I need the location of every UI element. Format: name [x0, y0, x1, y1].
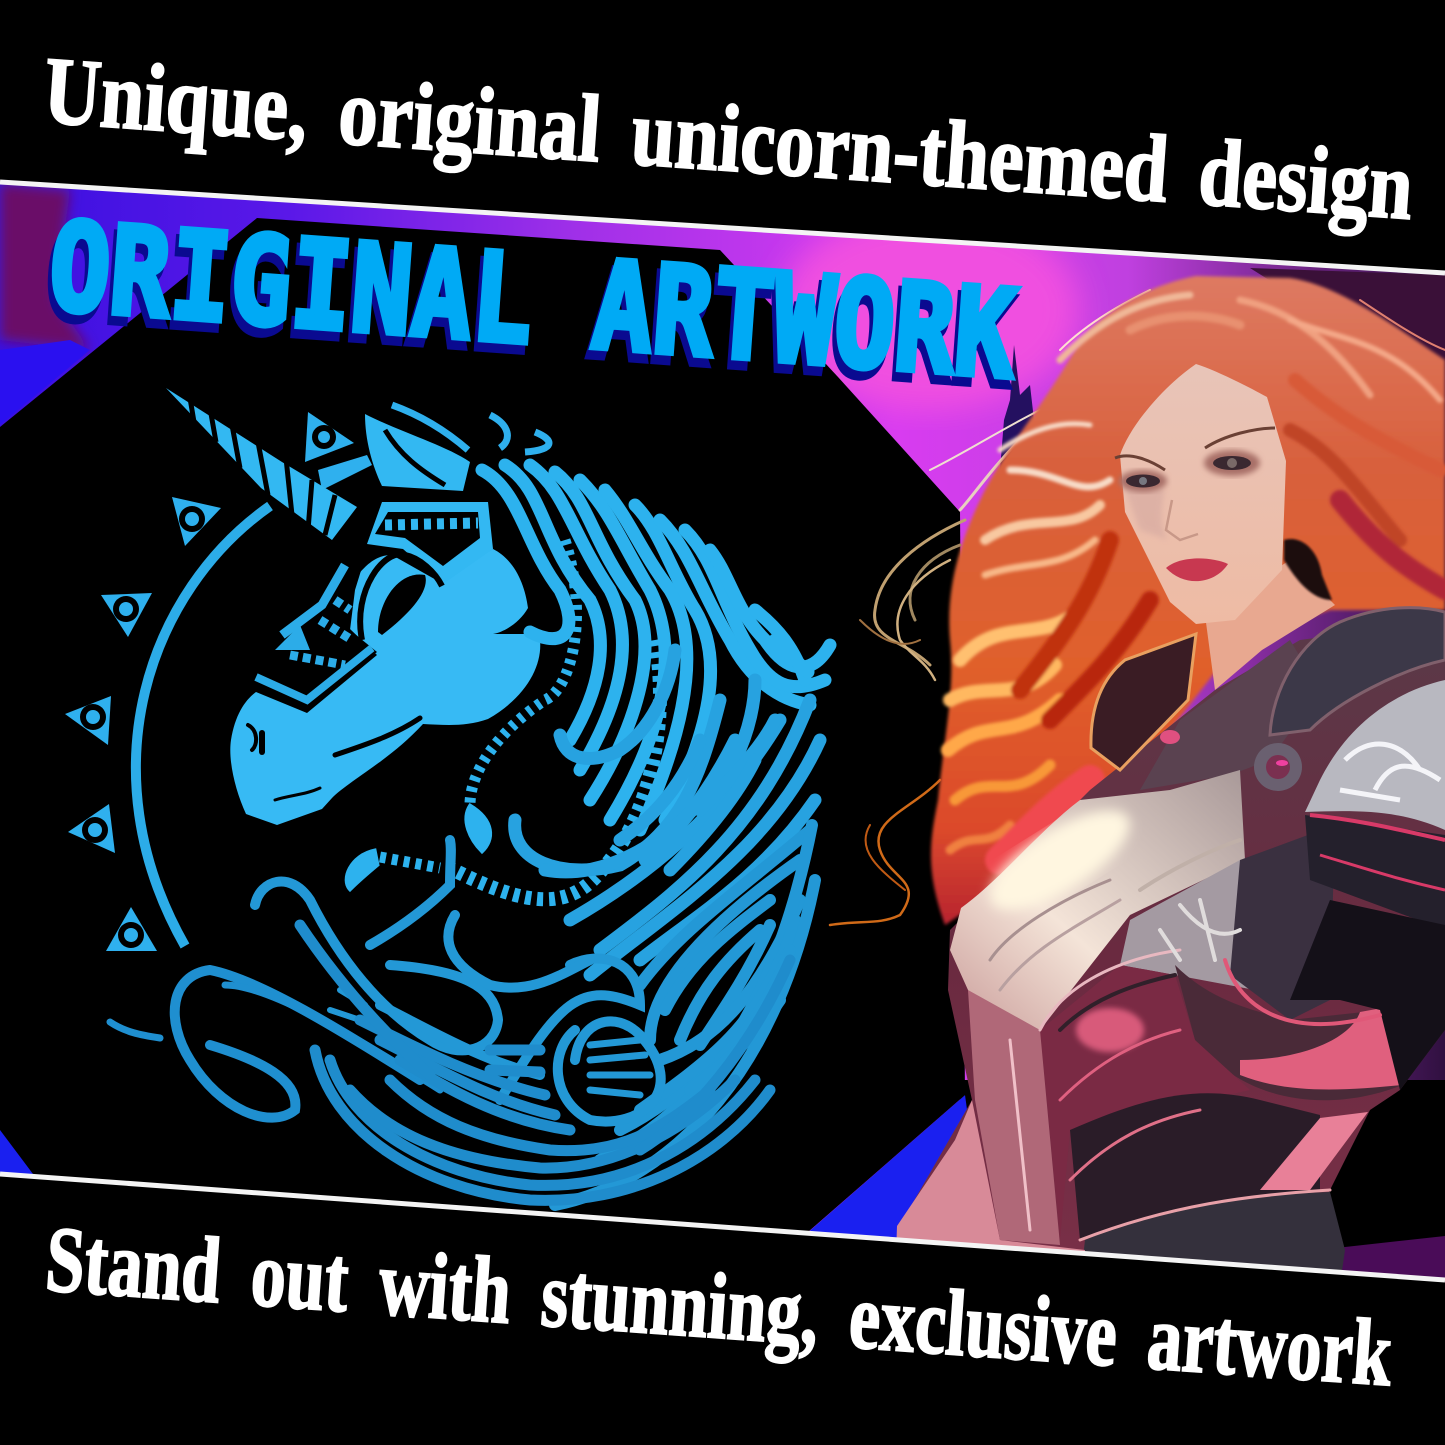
- noseband: [254, 548, 377, 708]
- belt: [1084, 1192, 1345, 1270]
- nose: [1166, 500, 1198, 540]
- right breast plate: [1175, 965, 1402, 1100]
- fantasy sky background: [0, 180, 1445, 1290]
- face: [1120, 364, 1286, 624]
- head: [230, 549, 540, 825]
- left abdomen: [1040, 966, 1249, 1120]
- rope and tassels: [346, 540, 660, 899]
- heading: original artwork: [41, 195, 1021, 415]
- bridle pattern: [375, 512, 480, 566]
- pink plate highlight: [1240, 1008, 1402, 1089]
- tail loop: [110, 970, 440, 1118]
- dark shoulder plate: [1270, 608, 1445, 735]
- ear inner: [385, 430, 445, 485]
- jaw and cheek lines: [248, 718, 420, 800]
- white band border top: [0, 182, 1445, 273]
- pink hip plate: [1260, 1112, 1368, 1190]
- black octagon behind unicorn: [0, 218, 965, 1232]
- mane strands middle: [515, 650, 820, 975]
- mane strands lower right: [555, 825, 815, 1205]
- horn: [166, 388, 357, 540]
- abdomen highlight: [1076, 1008, 1144, 1052]
- lower abdomen: [1070, 1093, 1320, 1240]
- center armor spine: [968, 990, 1060, 1245]
- ear: [365, 414, 470, 491]
- castle silhouette: [1000, 345, 1034, 468]
- ornate silver panel: [1120, 860, 1255, 990]
- breastplate glow: [982, 805, 1135, 912]
- forelock: [392, 405, 549, 452]
- sun ring: [136, 506, 270, 946]
- eye socket line: [360, 554, 442, 640]
- eyes and brows: [1115, 428, 1275, 492]
- face shading: [1122, 489, 1164, 536]
- eye: [378, 574, 426, 635]
- collar gem: [1160, 730, 1180, 744]
- neck shadow: [1284, 539, 1332, 600]
- white band border bottom: [0, 1174, 1445, 1280]
- triangle ornaments: [65, 412, 372, 951]
- bright breastplate: [950, 770, 1245, 1038]
- armor line work: [990, 840, 1380, 1240]
- shoulder layered plates: [1290, 815, 1445, 1090]
- skirt plates: [896, 1100, 1085, 1251]
- dark side armor: [1230, 825, 1335, 1020]
- lips: [1166, 558, 1228, 581]
- silver pauldron: [1305, 680, 1445, 830]
- bridle dashes: [385, 523, 478, 525]
- mane strands bottom: [300, 925, 790, 1200]
- title face: ORIGINAL ARTWORK: [45, 196, 1021, 406]
- flyaway hair strands: [830, 290, 1445, 925]
- collar plate: [1091, 634, 1196, 770]
- pauldron engraving: [1340, 744, 1440, 800]
- mane strands upper: [482, 465, 830, 830]
- neck: [1205, 560, 1335, 690]
- title extrusion: ORIGINAL ARTWORK: [41, 204, 1017, 415]
- gorget: [1140, 640, 1298, 790]
- swirl curls: [255, 840, 661, 1122]
- unicorn emblem: [65, 388, 830, 1205]
- hair highlights: [948, 295, 1445, 860]
- woman warrior illustration: [830, 276, 1445, 1290]
- shoulder gem clasp: [1254, 743, 1302, 791]
- bridle upper: [367, 502, 493, 584]
- armor torso: [912, 638, 1445, 1250]
- panel: artwork band: [0, 180, 1445, 1290]
- hair mass: [931, 276, 1445, 925]
